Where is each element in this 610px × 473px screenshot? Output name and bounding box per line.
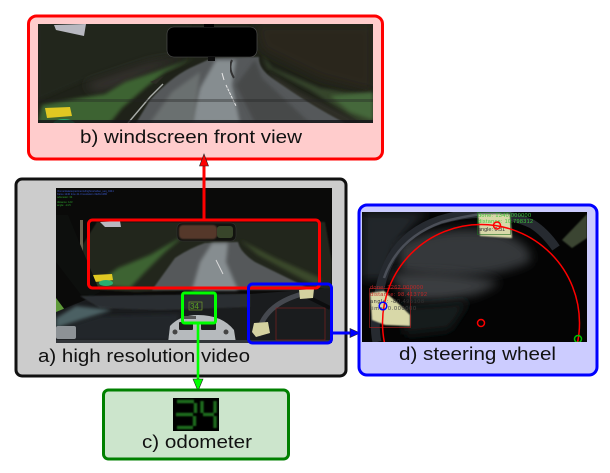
callout box: green odometer region: [182, 293, 216, 323]
arrow: video to windscreen view: [200, 154, 208, 220]
panel: high resolution video: [16, 179, 346, 376]
heading: high resolution video: a) high resolution video: [38, 345, 250, 366]
seven-segment display: 34: [173, 398, 219, 431]
overlay label boxes: [370, 212, 533, 328]
photo: car interior: /home/data/experiments/highres/video_seq_0441: [57, 189, 114, 193]
panel: windscreen front view: [28, 16, 382, 159]
photo: car interior: odometer: 34: [57, 195, 73, 199]
overlay label boxes: distance: 10.798312: [478, 219, 533, 225]
arrow: video to odometer: [193, 323, 203, 391]
photo: car interior: frame 1240 time 41.3 resolution 1920x1080: [57, 192, 108, 196]
arrow: video to steering wheel: [332, 328, 360, 338]
callout box: red windscreen region: [88, 220, 320, 288]
panel: odometer: [104, 390, 288, 459]
overlay label boxes: distance: 98.413792: [370, 292, 427, 298]
heading: odometer: c) odometer: [142, 431, 252, 452]
overlay label boxes: angle: -80.495108: [370, 299, 424, 305]
photo: car interior: [56, 188, 332, 343]
rear mirror with face: [177, 223, 236, 241]
heading: windscreen front view: b) windscreen front view: [80, 126, 303, 147]
photo: windscreen road view: [38, 24, 373, 129]
overlay label boxes: time: 0.000000: [370, 306, 416, 312]
panel: steering wheel: [358, 204, 598, 376]
overlay label boxes: done: 3262.000000: [370, 285, 423, 291]
mirror: [167, 24, 257, 61]
tracked markers: [379, 222, 582, 342]
photo: car interior: distance: 123: [57, 200, 73, 204]
callout box: blue steering wheel region: [248, 284, 332, 343]
heading: steering wheel: d) steering wheel: [399, 343, 556, 364]
fitted red circle: [382, 224, 580, 342]
overlay label boxes: angle: 0.31: [478, 227, 505, 233]
overlay label boxes: done: 1340.000000: [478, 213, 531, 219]
photo: car interior: 34: [190, 302, 199, 311]
photo: car interior: angle: -14.5: [57, 203, 71, 207]
photo: steering wheel with tracking overlay: [362, 212, 587, 342]
